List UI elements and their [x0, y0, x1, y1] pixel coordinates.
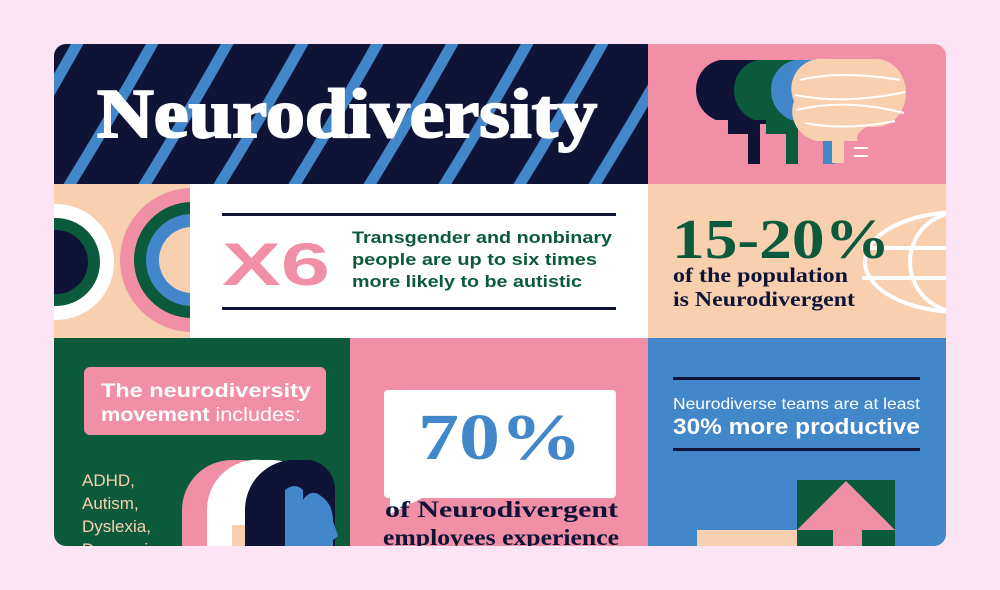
panel: movement: Dyspraxia	[82, 540, 158, 559]
panel: productivity: Neurodiverse teams are at least	[673, 396, 921, 413]
panel: 15-20%: of the population	[673, 263, 848, 287]
panel: productivity: 30% more productive	[673, 414, 920, 439]
panel: 70%: employees experience	[383, 525, 619, 550]
panel: movement: ADHD,	[82, 471, 135, 490]
panel: x6 stat: X6	[222, 231, 330, 298]
panel: x6 stat: people are up to six times	[352, 250, 597, 269]
icon: brain head	[791, 59, 906, 163]
panel: 15-20%: 15-20%	[672, 209, 890, 271]
panel: movement: Dyslexia,	[82, 517, 151, 536]
icon: navy head	[696, 60, 766, 164]
panel: 70%: 70%	[418, 401, 582, 474]
icon: blue head	[771, 60, 835, 164]
panel: productivity	[648, 338, 946, 550]
panel: 70%: of Neurodivergent	[385, 497, 618, 522]
panel: x6 stat: more likely to be autistic	[352, 272, 582, 291]
panel: x6 stat	[190, 184, 648, 338]
icon: green head	[734, 60, 798, 164]
panel: circles	[54, 184, 190, 338]
speech bubble	[384, 390, 616, 514]
panel: title: Neurodiversity	[97, 76, 597, 153]
panel: 15-20%: is Neurodivergent	[673, 287, 855, 311]
panel: 15-20%	[648, 184, 946, 338]
panel: title	[54, 44, 648, 184]
panel: movement: The neurodiversity	[101, 381, 312, 402]
panel: x6 stat: Transgender and nonbinary	[352, 228, 613, 247]
panel: movement	[54, 338, 350, 560]
panel: 70%	[350, 338, 648, 550]
panel: movement: Autism,	[82, 494, 139, 513]
panel: movement: movement includes:	[101, 405, 301, 426]
panel: heads top right	[648, 44, 946, 184]
